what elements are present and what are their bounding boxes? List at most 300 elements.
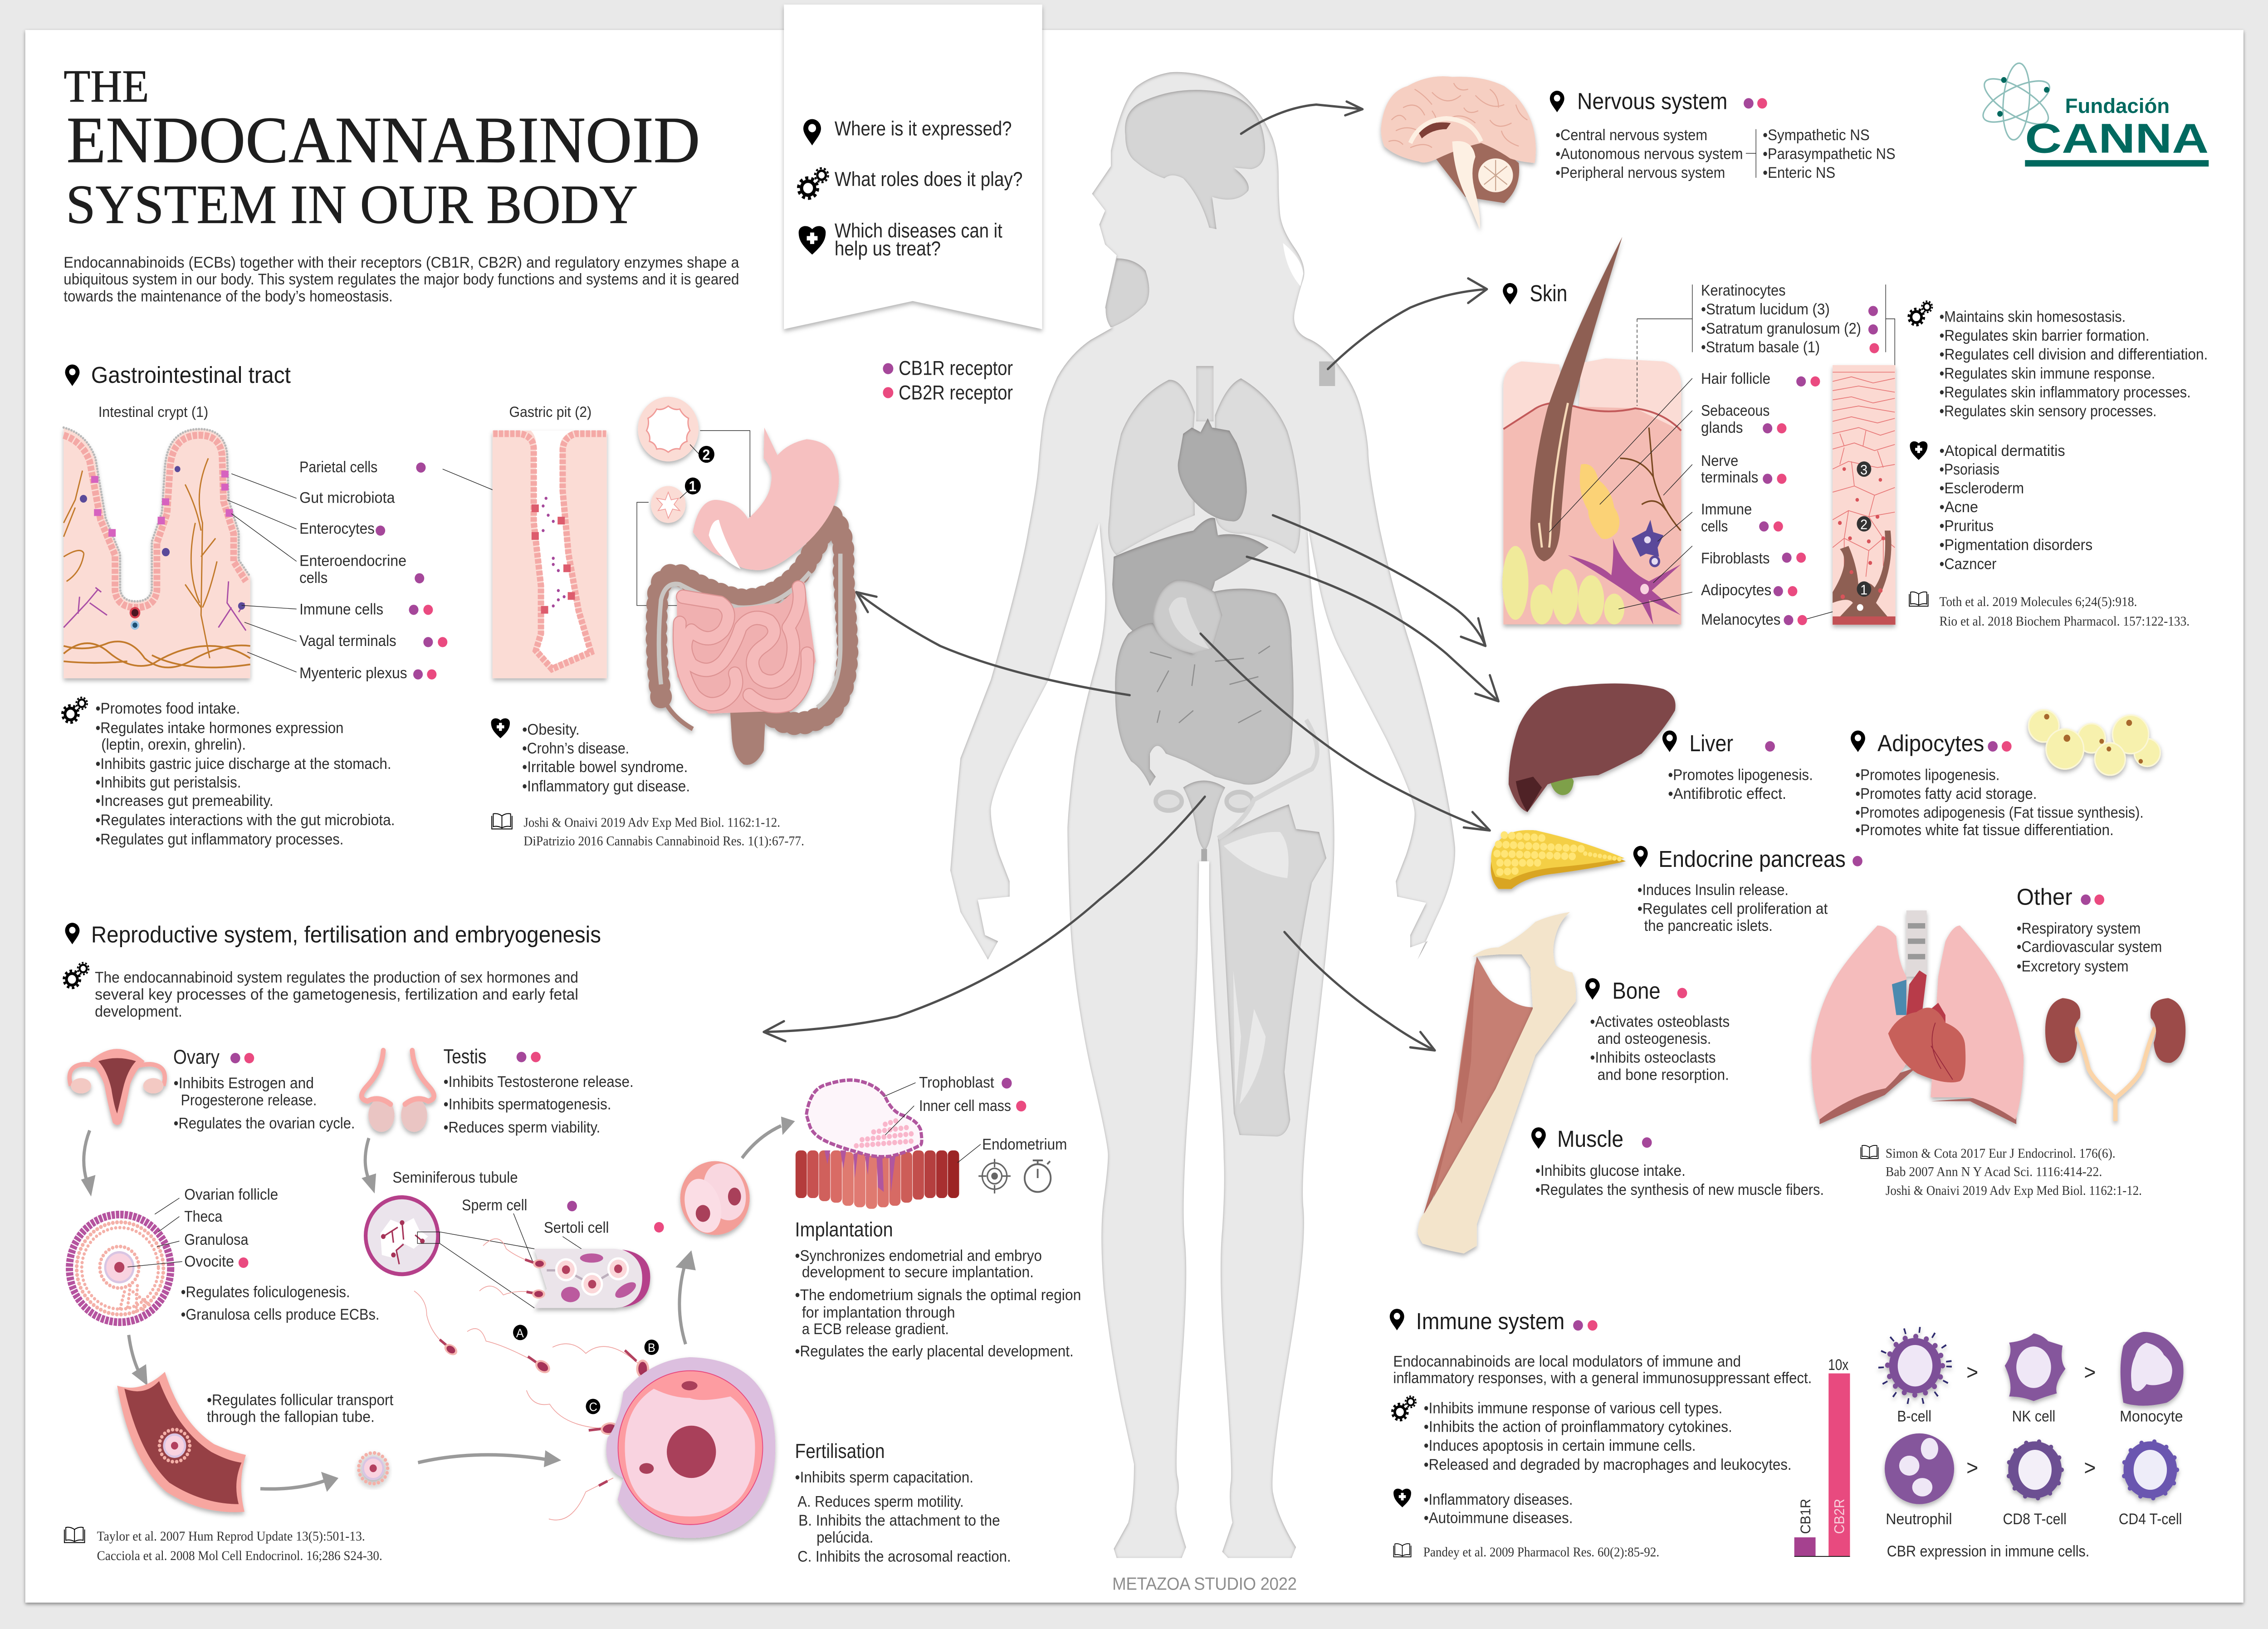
- list: roles: [95, 700, 395, 847]
- list: roles: •Regulates gut inflammatory processes.: [95, 830, 343, 847]
- label: gastric pit: Gastric pit (2): [509, 404, 591, 420]
- panel: liver: [1509, 684, 1813, 812]
- list: skin roles: •Regulates skin barrier formation.: [1940, 327, 2150, 344]
- references: Simon & Cota 2017 Eur J Endocrinol. 176(6).: [1886, 1146, 2116, 1161]
- list: autonomic branches: •Sympathetic NS: [1763, 126, 1870, 143]
- list: immune roles: •Induces apoptosis in certain immune cells.: [1424, 1437, 1696, 1454]
- arrow: follicle to tube: [129, 1335, 147, 1386]
- question: roles: What roles does it play?: [835, 168, 1022, 191]
- references: [97, 1529, 382, 1563]
- seminiferous labels: Sperm cell: [462, 1196, 527, 1213]
- muscle heading: Muscle: [1557, 1126, 1623, 1152]
- list: roles: •Increases gut premeability.: [95, 792, 274, 809]
- panel: gastrointestinal tract: [63, 362, 848, 849]
- crypt labels with receptor dots: Myenteric plexus: [299, 664, 407, 681]
- heading: [2017, 884, 2104, 910]
- icon: book: [64, 1527, 85, 1542]
- immune cell labels: Neutrophil: [1886, 1510, 1952, 1527]
- implantation text: [795, 1247, 1081, 1360]
- icon: book: [1861, 1145, 1878, 1159]
- skin structure labels: glands: [1701, 419, 1743, 436]
- arrow: adipocytes: [1247, 557, 1499, 701]
- references: Joshi & Onaivi 2019 Adv Exp Med Biol. 1162:1-12.: [523, 816, 780, 830]
- list: autonomic branches: •Parasympathetic NS: [1763, 145, 1896, 162]
- muscle text: •Inhibits glucose intake.: [1535, 1162, 1686, 1179]
- ovary heading: [173, 1046, 254, 1068]
- list: other systems: •Respiratory system: [2017, 920, 2141, 937]
- reference: Pandey et al. 2009 Pharmacol Res. 60(2):85-92.: [1423, 1545, 1659, 1560]
- testis text: [444, 1073, 634, 1135]
- implantation text: •The endometrium signals the optimal region: [795, 1286, 1081, 1303]
- icon: pin: [65, 923, 79, 944]
- bar chart: CB1R vs CB2R expression: [1794, 1356, 1850, 1556]
- immune cell labels: Monocyte: [2120, 1408, 2183, 1425]
- icon: gears: [1392, 1396, 1416, 1420]
- testis heading: Testis: [444, 1046, 486, 1068]
- list: nervous divisions: •Autonomous nervous system: [1555, 145, 1743, 162]
- badge 3: [1857, 461, 1871, 478]
- implantation leader lines: [884, 1083, 981, 1163]
- immune cell labels: CD4 T-cell: [2119, 1510, 2182, 1527]
- keratinocyte labels: Keratinocytes: [1701, 282, 1786, 299]
- fallopian text: [207, 1391, 393, 1425]
- description: [95, 969, 578, 1020]
- tubule illustration: [366, 1197, 440, 1274]
- question: diseases: Which diseases can it: [835, 220, 1002, 242]
- icon: book: [1909, 592, 1928, 606]
- arrow: two-cell to implantation: [742, 1116, 795, 1158]
- heading: Endocrine pancreas: [1658, 846, 1846, 872]
- adipocyte text: •Promotes fatty acid storage.: [1855, 785, 2037, 802]
- list: diseases: •Irritable bowel syndrome.: [522, 758, 688, 775]
- icon: pin: [1390, 1309, 1404, 1331]
- lungs and heart illustration: [1811, 910, 2024, 1124]
- description: several key processes of the gametogenesis, fertilization and early fetal: [95, 986, 578, 1003]
- list: immune roles: [1424, 1399, 1792, 1473]
- follicle text: •Regulates foliculogenesis.: [181, 1283, 350, 1301]
- crypt labels with receptor dots: Enteroendocrine: [299, 552, 406, 569]
- muscle illustration: [1423, 957, 1533, 1215]
- uterus: [1156, 781, 1252, 861]
- numbered badge 2: [699, 446, 714, 463]
- two-cell embryo illustration: [679, 1157, 753, 1238]
- bone text: •Inhibits osteoclasts: [1590, 1049, 1716, 1066]
- uterus illustration: [69, 1049, 165, 1125]
- fertilisation text: A. Reduces sperm motility.: [797, 1493, 964, 1510]
- stomach: [1153, 580, 1222, 654]
- liver: [1112, 518, 1269, 634]
- list: immune diseases: [1424, 1491, 1573, 1526]
- icon: pin: [1633, 846, 1648, 867]
- list: roles: •Regulates intake hormones expression: [95, 719, 343, 736]
- seminiferous labels: [392, 1169, 664, 1236]
- legend: receptors: CB2R receptor: [899, 382, 1013, 404]
- references: [523, 816, 804, 849]
- bone text: •Activates osteoblasts: [1590, 1013, 1730, 1030]
- follicle labels: Ovocite: [184, 1252, 234, 1270]
- arrow: skin: [1328, 279, 1487, 369]
- stomach: [710, 428, 839, 570]
- heading: Skin: [1530, 280, 1567, 306]
- immune cell: B-cell: [1881, 1330, 1949, 1402]
- crypt labels with receptor dots: [299, 458, 447, 681]
- bar chart: CB1R vs CB2R expression: CB1R: [1797, 1499, 1813, 1534]
- icon: heart: [799, 226, 826, 254]
- keratinocyte labels: •Stratum basale (1): [1701, 338, 1820, 356]
- immune cell: CD8 T-cell: [2008, 1441, 2062, 1498]
- list: diseases: [522, 721, 690, 795]
- right lung: [1215, 378, 1300, 554]
- badge C: C: [589, 1400, 597, 1414]
- fallopian text: through the fallopian tube.: [207, 1408, 375, 1425]
- small intestine: [677, 582, 816, 714]
- implantation labels: Inner cell mass: [919, 1097, 1011, 1114]
- arrow: liver: [1273, 515, 1486, 646]
- list: immune diseases: •Inflammatory diseases.: [1424, 1491, 1573, 1508]
- icon: pin: [803, 119, 821, 146]
- list: autonomic branches: [1763, 126, 1896, 181]
- ovarian follicle illustration: [69, 1214, 171, 1322]
- list: skin roles: [1940, 308, 2208, 420]
- gastric pit illustration: [493, 430, 607, 678]
- fallopian text: •Regulates follicular transport: [207, 1391, 393, 1409]
- list: diseases: •Inflammatory gut disease.: [522, 777, 690, 795]
- crypt labels with receptor dots: Enterocytes: [299, 520, 375, 537]
- list: skin roles: •Maintains skin homesostasis.: [1940, 308, 2126, 325]
- ovary heading: Ovary: [173, 1046, 220, 1068]
- bar chart: CB1R vs CB2R expression: CB2R: [1831, 1499, 1847, 1534]
- follicle labels: Theca: [184, 1208, 223, 1225]
- ovary text: •Inhibits Estrogen and: [174, 1074, 314, 1091]
- testis text: •Reduces sperm viability.: [444, 1118, 600, 1135]
- muscle text: •Regulates the synthesis of new muscle fibers.: [1535, 1181, 1824, 1198]
- numbered badge 1: [685, 478, 701, 494]
- comparison signs: [1966, 1360, 2096, 1480]
- arrow: brain: [1241, 102, 1363, 134]
- panel: bone and muscle: [1418, 912, 1824, 1253]
- legend: receptors: [883, 357, 1013, 404]
- skin cross-section illustration: [1502, 237, 1681, 624]
- list: other systems: •Excretory system: [2017, 957, 2129, 975]
- title: [64, 61, 700, 235]
- leader lines: [1549, 378, 1837, 620]
- references: Bab 2007 Ann N Y Acad Sci. 1116:414-22.: [1886, 1165, 2102, 1179]
- icon: pin: [1531, 1127, 1546, 1149]
- implantation illustration: [796, 1080, 959, 1209]
- intro paragraph: Endocannabinoids (ECBs) together with their receptors (CB1R, CB2R) and regulatory enzymes shape a: [64, 254, 739, 271]
- keratinocyte labels: •Stratum lucidum (3): [1701, 300, 1830, 318]
- crypt labels with receptor dots: Parietal cells: [299, 458, 377, 475]
- description: The endocannabinoid system regulates the production of sex hormones and: [95, 969, 578, 986]
- icon: pin: [65, 364, 79, 386]
- badge 1: 1: [1860, 582, 1867, 598]
- muscle cut-outs: [1224, 832, 1289, 1107]
- comparison signs: >: [2084, 1455, 2096, 1480]
- seminiferous labels: Sertoli cell: [544, 1218, 609, 1236]
- liver text: [1668, 766, 1813, 802]
- badge B: B: [648, 1340, 655, 1355]
- immune cell labels: CD8 T-cell: [2003, 1510, 2067, 1527]
- numbered badge 1: 1: [689, 478, 696, 494]
- immune cell: NK cell: [2005, 1333, 2066, 1401]
- trophoblast roots: [825, 1150, 895, 1192]
- femur illustration: [1418, 912, 1576, 1253]
- oocyte illustration: [359, 1453, 388, 1484]
- testis text: •Inhibits spermatogenesis.: [444, 1096, 611, 1113]
- ovary text: •Regulates the ovarian cycle.: [174, 1115, 355, 1132]
- bone text: [1590, 1013, 1730, 1083]
- heading: Adipocytes: [1877, 730, 1984, 756]
- list: skin diseases: •Psoriasis: [1940, 460, 1999, 478]
- skin structure labels: Hair follicle: [1701, 370, 1770, 387]
- follicle text: [181, 1283, 379, 1323]
- label: intestinal crypt: Intestinal crypt (1): [98, 404, 208, 420]
- list: roles: •Inhibits gastric juice discharge at the stomach.: [95, 755, 391, 772]
- icon: book: [492, 814, 512, 829]
- badge 2: [1857, 516, 1871, 532]
- banner shape: [784, 5, 1042, 329]
- heading with receptor dots: Nervous system: [1577, 88, 1727, 114]
- pancreas text: [1637, 881, 1828, 934]
- comparison signs: >: [1966, 1455, 1978, 1480]
- references: Cacciola et al. 2008 Mol Cell Endocrinol. 16;286 S24-30.: [97, 1549, 382, 1563]
- zoom lines: [440, 1213, 593, 1308]
- implantation text: for implantation through: [802, 1304, 955, 1321]
- muscle text: [1535, 1162, 1824, 1198]
- Sertoli panel illustration: [534, 1249, 650, 1308]
- immune cell: monocyte: [2121, 1332, 2184, 1406]
- icon: gears: [63, 697, 87, 723]
- list: roles: •Inhibits gut peristalsis.: [95, 773, 241, 791]
- list: autonomic branches: •Enteric NS: [1763, 164, 1835, 181]
- human body silhouette with organs: [950, 72, 1455, 1558]
- implantation labels: Endometrium: [982, 1135, 1067, 1153]
- references: [1940, 595, 2190, 629]
- icon: pin: [1503, 283, 1517, 304]
- brain illustration: [1381, 76, 1536, 229]
- crypt labels with receptor dots: cells: [299, 569, 327, 586]
- badge B: [645, 1340, 659, 1355]
- stomach cross-section 1: [651, 486, 685, 523]
- references: Rio et al. 2018 Biochem Pharmacol. 157:122-133.: [1940, 614, 2190, 629]
- bone heading: [1613, 978, 1687, 1004]
- panel: reproductive system: [64, 922, 1081, 1565]
- heading: Other: [2017, 884, 2072, 910]
- skin structure labels: Fibroblasts: [1701, 549, 1769, 567]
- bar chart: CB1R vs CB2R expression: 10x: [1828, 1356, 1849, 1373]
- chart caption: CBR expression in immune cells.: [1887, 1542, 2089, 1560]
- trachea: [1196, 366, 1213, 421]
- list: roles: •Promotes food intake.: [95, 700, 240, 717]
- banner: guide questions: [784, 5, 1042, 329]
- ovary text: [174, 1074, 355, 1132]
- fat cells illustration: [2028, 710, 2160, 775]
- intestinal crypt illustration: [64, 428, 250, 678]
- follicle labels: Ovarian follicle: [184, 1186, 278, 1203]
- keratinocyte labels: •Satratum granulosum (2): [1701, 319, 1861, 337]
- intro text: inflammatory responses, with a general immunosuppressant effect.: [1393, 1369, 1812, 1386]
- pointer arrows from body to organs: [764, 102, 1499, 1051]
- implantation text: •Synchronizes endometrial and embryo: [795, 1247, 1042, 1264]
- bone text: and bone resorption.: [1598, 1066, 1729, 1083]
- skin structure labels: terminals: [1701, 469, 1758, 486]
- implantation heading: Implantation: [795, 1218, 893, 1241]
- atom orbits: [1978, 62, 2055, 141]
- intro text: Endocannabinoids are local modulators of immune and: [1393, 1353, 1741, 1370]
- testis illustration: [362, 1051, 434, 1132]
- panel: endocrine pancreas: [1491, 830, 1862, 934]
- comparison signs: >: [1966, 1360, 1978, 1384]
- immune cell: neutrophil: [1885, 1433, 1954, 1504]
- follicle text: •Granulosa cells produce ECBs.: [181, 1306, 379, 1323]
- references: [1886, 1146, 2142, 1198]
- question: where: Where is it expressed?: [835, 117, 1012, 140]
- adipocyte text: •Promotes adipogenesis (Fat tissue synthesis).: [1855, 804, 2144, 821]
- list: other systems: [2017, 920, 2162, 975]
- heart: [1888, 970, 1965, 1082]
- rectum: [729, 692, 767, 765]
- trophoblast blastocyst: [807, 1080, 922, 1157]
- crypt labels with receptor dots: Gut microbiota: [299, 489, 395, 506]
- arrow: muscle and bone: [1285, 932, 1435, 1051]
- pancreas illustration: [1491, 830, 1626, 889]
- list: other systems: •Cardiovascular system: [2017, 938, 2162, 955]
- implantation labels: Trophoblast: [919, 1074, 994, 1091]
- list: skin diseases: •Pruritus: [1940, 517, 1994, 534]
- liver text: •Promotes lipogenesis.: [1668, 766, 1813, 783]
- references: Joshi & Onaivi 2019 Adv Exp Med Biol. 1162:1-12.: [1886, 1184, 2142, 1198]
- badge A: [513, 1325, 528, 1340]
- panel: other systems: [1811, 884, 2185, 1198]
- implantation text: development to secure implantation.: [802, 1263, 1034, 1281]
- list: nervous divisions: [1555, 126, 1743, 181]
- immune cell labels: NK cell: [2012, 1408, 2055, 1425]
- title: ENDOCANNABINOID: [67, 103, 700, 176]
- list: immune roles: •Inhibits the action of proinflammatory cytokines.: [1424, 1418, 1732, 1435]
- bracket: [1746, 129, 1756, 178]
- question: diseases: help us treat?: [835, 238, 941, 260]
- bone heading: Bone: [1613, 978, 1661, 1004]
- panel: nervous system: [1381, 76, 1896, 229]
- list: skin roles: •Regulates skin immune response.: [1940, 365, 2155, 382]
- icon: gears: [798, 168, 828, 198]
- logo: Fundación CANNA: [1978, 62, 2209, 166]
- skin structure labels: Melanocytes: [1701, 611, 1780, 628]
- hair highlight: [1283, 243, 1303, 286]
- intro paragraph: [64, 254, 739, 305]
- pancreas text: •Regulates cell proliferation at: [1637, 900, 1828, 917]
- list: roles: (leptin, orexin, ghrelin).: [101, 736, 246, 753]
- list: roles: •Regulates interactions with the gut microbiota.: [95, 811, 395, 828]
- logo: Fundación CANNA: CANNA: [2025, 115, 2209, 161]
- question: diseases: [835, 220, 1002, 260]
- implantation labels: [919, 1074, 1067, 1153]
- heart: [1178, 418, 1247, 521]
- list: skin roles: •Regulates skin inflammatory processes.: [1940, 383, 2191, 401]
- testis heading: [444, 1046, 541, 1068]
- list: skin diseases: •Cazncer: [1940, 555, 1996, 572]
- wordmark: Fundación: [2065, 95, 2170, 117]
- left lung: [1811, 925, 1909, 1120]
- bone text: and osteogenesis.: [1598, 1030, 1711, 1047]
- femur and muscle: [1218, 804, 1326, 1136]
- left lung: [1108, 380, 1195, 555]
- adipocyte text: •Promotes lipogenesis.: [1855, 766, 1999, 783]
- endometrium columns: [796, 1150, 959, 1209]
- badge C: [586, 1399, 600, 1414]
- fertilised egg illustration: [606, 1357, 775, 1538]
- numbered badge 2: 2: [702, 447, 710, 463]
- fertilisation text: B. Inhibits the attachment to the: [798, 1512, 1000, 1529]
- badge A: A: [516, 1326, 524, 1340]
- list: immune roles: •Inhibits immune response of various cell types.: [1424, 1399, 1722, 1417]
- sperm cells: [414, 1239, 649, 1520]
- liver illustration: [1509, 684, 1676, 812]
- panel: skin: [1502, 237, 2208, 629]
- list: nervous divisions: •Central nervous system: [1555, 126, 1707, 143]
- list: immune diseases: •Autoimmune diseases.: [1424, 1509, 1573, 1526]
- list: skin diseases: •Escleroderm: [1940, 479, 2024, 497]
- crypt labels with receptor dots: Vagal terminals: [299, 632, 396, 649]
- lung undersides: [1819, 1067, 2016, 1124]
- list: skin diseases: •Acne: [1940, 498, 1978, 515]
- kidneys and ureters illustration: [2045, 998, 2185, 1121]
- pelvic vessel: [1218, 720, 1317, 838]
- fertilisation text: pelúcida.: [816, 1529, 873, 1546]
- follicle labels: Granulosa: [184, 1231, 249, 1248]
- heading: Liver: [1689, 730, 1733, 756]
- skin structure labels: Immune: [1701, 500, 1752, 518]
- follicle leader lines: [127, 1198, 182, 1267]
- arrow: pancreas: [1201, 634, 1490, 831]
- fertilisation text: •Inhibits sperm capacitation.: [795, 1468, 973, 1486]
- follicle labels: [184, 1186, 278, 1270]
- references: DiPatrizio 2016 Cannabis Cannabinoid Res. 1(1):67-77.: [523, 834, 804, 849]
- icon: heart: [1910, 441, 1927, 460]
- icon: pin: [1585, 978, 1600, 1000]
- implantation text: a ECB release gradient.: [802, 1320, 949, 1337]
- studio credit: METAZOA STUDIO 2022: [1112, 1575, 1297, 1594]
- panel: adipocytes: [1851, 710, 2160, 838]
- colon: [656, 515, 848, 724]
- keratinocytes bracket: [1637, 284, 1895, 365]
- immune cell: CD4 T-cell: [2123, 1441, 2177, 1498]
- keratinocyte labels: [1701, 282, 1879, 356]
- heading: Gastrointestinal tract: [91, 362, 291, 388]
- list: skin diseases: •Pigmentation disorders: [1940, 536, 2092, 553]
- heading: Reproductive system, fertilisation and embryogenesis: [91, 922, 601, 948]
- digestive tract illustration: [656, 428, 848, 765]
- skin patch: [1319, 362, 1335, 386]
- icon: target: [978, 1159, 1011, 1194]
- icon: stopwatch: [1025, 1160, 1051, 1192]
- adipocyte text: •Promotes white fat tissue differentiation.: [1855, 821, 2114, 838]
- icon: pin: [1662, 730, 1677, 752]
- brain: [1125, 90, 1265, 229]
- epidermis column illustration: [1833, 365, 1896, 625]
- fertilisation heading: Fertilisation: [795, 1440, 885, 1463]
- intro paragraph: ubiquitous system in our body. This system regulates the major body functions and systems and it is geared: [64, 270, 739, 288]
- list: immune roles: •Released and degraded by macrophages and leukocytes.: [1424, 1456, 1792, 1473]
- pancreas text: •Induces Insulin release.: [1637, 881, 1789, 898]
- arrow: testis to tubule: [362, 1138, 376, 1194]
- implantation text: •Regulates the early placental development.: [795, 1342, 1074, 1360]
- badge 2: 2: [1860, 517, 1867, 532]
- arrow: egg to two-cell: [675, 1250, 696, 1344]
- liver text: •Antifibrotic effect.: [1668, 785, 1786, 802]
- right lung: [1931, 925, 2024, 1120]
- list: skin roles: •Regulates cell division and differentiation.: [1940, 345, 2208, 363]
